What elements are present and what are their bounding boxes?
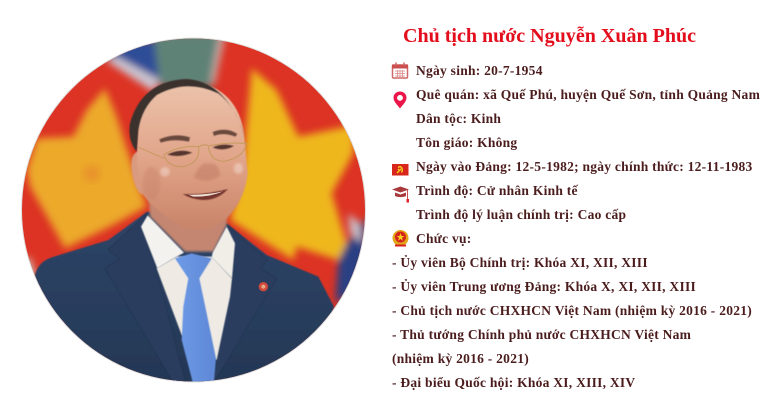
mouth — [183, 189, 228, 200]
hair — [129, 79, 245, 152]
eyes — [167, 151, 192, 156]
shirt — [157, 257, 232, 360]
nose — [194, 163, 221, 181]
position: National Assembly deputy: - Đại biểu Quốc hội: Khóa XI, XIII, XIV — [392, 375, 635, 390]
face — [137, 81, 248, 229]
icon: graduation cap — [392, 186, 409, 202]
collar — [141, 215, 184, 268]
Prime Minister term: (nhiệm kỳ 2016 - 2021) — [392, 351, 529, 366]
flower centre — [84, 165, 100, 181]
political theory level: Trình độ lý luận chính trị: Cao cấp — [416, 207, 626, 222]
icon: calendar — [392, 62, 408, 78]
religion: Tôn giáo: Không — [416, 135, 517, 150]
flag background — [22, 38, 365, 382]
portrait photo circle — [10, 30, 377, 390]
position: President: - Chủ tịch nước CHXHCN Việt Nam (nhiệm kỳ 2016 - 2021) — [392, 303, 752, 318]
ear — [131, 152, 143, 195]
birth date: Ngày sinh: 20-7-1954 — [416, 63, 543, 78]
neck — [148, 193, 228, 252]
ethnicity: Dân tộc: Kinh — [416, 111, 501, 126]
icon: party flag — [392, 164, 408, 176]
lapels — [105, 213, 185, 382]
info text block — [392, 63, 761, 390]
position: Politburo: - Ủy viên Bộ Chính trị: Khóa XI, XII, XIII — [392, 255, 648, 270]
icon: national emblem — [392, 230, 408, 246]
eyebrows — [159, 135, 190, 143]
suit — [35, 212, 334, 390]
position: Prime Minister: - Thủ tướng Chính phủ nước CHXHCN Việt Nam — [392, 327, 692, 342]
title: Chủ tịch nước Nguyễn Xuân Phúc — [403, 25, 696, 47]
party entry dates: Ngày vào Đảng: 12-5-1982; ngày chính thức: 12-11-1983 — [416, 159, 753, 174]
icon: location pin — [394, 92, 406, 108]
education: Trình độ: Cử nhân Kinh tế — [416, 183, 579, 198]
pin — [259, 282, 268, 291]
hometown: Quê quán: xã Quế Phú, huyện Quế Sơn, tỉnh Quảng Nam — [416, 87, 761, 102]
tie — [175, 253, 216, 382]
positions heading: Chức vụ: — [416, 231, 472, 246]
position: Central Committee: - Ủy viên Trung ương Đảng: Khóa X, XI, XII, XIII — [392, 279, 696, 294]
glasses — [138, 143, 247, 167]
cheek shading — [144, 168, 159, 191]
